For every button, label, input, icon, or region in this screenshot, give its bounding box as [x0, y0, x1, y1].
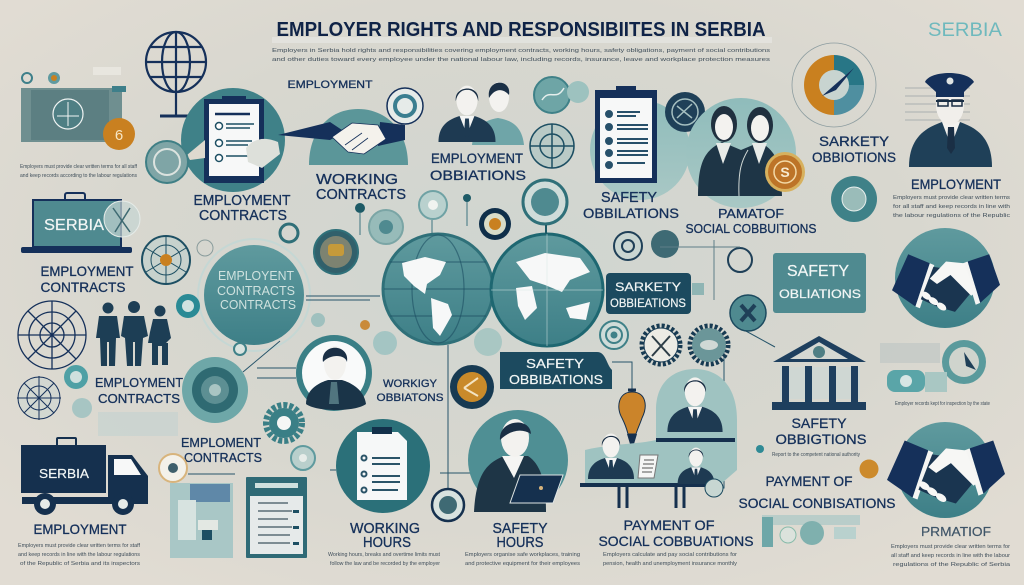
chart: gauge [792, 43, 876, 127]
intro text: Employers in Serbia hold rights and responsibilities covering employment contracts, working hours, safety obligations, payment of social contributions [272, 48, 771, 54]
text block: truck: Employers must provide clear written terms for staff [18, 543, 141, 549]
heading: payment of social cobbuations: SOCIAL COBBUATIONS [598, 533, 754, 549]
arrows: connectors [188, 296, 775, 490]
panel: top-left device [21, 67, 135, 150]
icon: target circle [182, 357, 248, 423]
panel: employment contracts circle: EMPLOYENT [218, 269, 294, 283]
text block: safety hours: and protective equipment for their employees [465, 561, 581, 567]
icon: teal gear [690, 326, 728, 364]
heading: safety obligations [583, 190, 679, 221]
icon: wire globe [146, 32, 206, 116]
heading: safety obligations bank [776, 416, 866, 447]
icon: side circle [942, 340, 986, 384]
heading: sarkety obligations [812, 134, 896, 165]
icon: two women [686, 98, 796, 208]
heading: safety obligations: SAFETY [601, 190, 657, 206]
serbia wordmark: SERBIA [928, 20, 1002, 41]
heading: payment of social contributions [686, 206, 817, 236]
chart: left globe [383, 234, 493, 344]
text block: payment: Employers calculate and pay social contributions for [603, 552, 737, 558]
text block: employment right: Employers must provide clear written terms [893, 195, 1011, 201]
label: safety obligations box: SAFETY [787, 263, 849, 280]
icon: gold keyhole badge [314, 230, 358, 274]
icon: teal connector badge right [523, 180, 567, 234]
heading: payment of social conbisations [738, 474, 896, 511]
label: sarkety obligations box: OBBIEATIONS [610, 296, 686, 310]
heading: sarkety obligations: SARKETY [819, 134, 889, 149]
heading: employment obligations: EMPLOYMENT [431, 151, 523, 166]
heading: employment contracts mid left: CONTRACTS [98, 391, 180, 406]
text block: side: Employer records kept for inspection by the state [895, 401, 990, 407]
label: sarkety obligations box [606, 273, 704, 314]
icon: truck: SERBIA [39, 467, 90, 481]
icon: laptop serbia [21, 193, 140, 253]
heading: employment contracts left: EMPLOYMENT [40, 264, 134, 279]
icon: teal dots left [64, 294, 200, 418]
icon: bank building [772, 336, 866, 410]
heading: payment of social conbisations: PAYMENT OF [766, 474, 852, 489]
icon: orange coin [765, 152, 805, 192]
icon: working hours document [336, 419, 430, 513]
heading: working hours: HOURS [363, 535, 411, 551]
icon: pale building plan [170, 483, 233, 558]
icon: people silhouettes [96, 301, 171, 366]
text block: employment right: for all staff and keep records in line with [893, 204, 1010, 210]
text block: truck: of the Republic of Serbia and its inspectors [20, 561, 141, 567]
heading: working hours: WORKING [350, 521, 420, 537]
icon: two men [438, 82, 524, 145]
icon: gold ring [159, 454, 187, 482]
text block: working hours [328, 552, 441, 567]
heading: employment obligations [430, 151, 526, 183]
icon: handshake top right [892, 228, 1000, 328]
heading: prmatiof: PRMATIOF [921, 525, 991, 539]
text block: safety hours: Employers organise safe workplaces, training [465, 552, 580, 558]
intro text: and other duties toward every employee under the national labour law, including records, insurance, leave and workplace protection measures [272, 57, 771, 63]
icon: compass [142, 236, 190, 284]
icon: laptop serbia: SERBIA [44, 217, 104, 234]
heading: sarkety obligations: OBBIOTIONS [812, 150, 896, 165]
heading: employment contracts mid left [95, 375, 183, 406]
icon: ring connector [432, 489, 464, 521]
icon: truck [21, 438, 148, 515]
text block: top-left: and keep records according to the labour regulations [20, 173, 137, 179]
heading: employment right: EMPLOYMENT [911, 176, 1001, 192]
chart: right globe [491, 234, 603, 346]
text block: truck: and keep records in line with the labour regulations [18, 552, 141, 558]
icon: radar small [530, 124, 574, 168]
heading: payment of social cobbuations: PAYMENT OF [624, 517, 714, 533]
icon: portrait [296, 335, 372, 411]
icon: teal crossed badge [730, 295, 766, 331]
text block: prmatiof: Employers must provide clear written terms for [891, 544, 1010, 550]
heading: working hours [350, 521, 420, 551]
text block: safety hours [465, 552, 581, 567]
text block: payment [603, 552, 738, 567]
text block: prmatiof: all staff and keep records in line with the labour [891, 553, 1010, 559]
text block: working hours: Working hours, breaks and overtime limits must [328, 552, 441, 558]
icon: man with laptop [468, 410, 568, 512]
icon: teal ring center [291, 446, 315, 470]
icon: light bulb [619, 390, 645, 444]
icon: small rings [197, 224, 298, 256]
heading: safety obligations bank: SAFETY [792, 416, 846, 431]
label: safety obligations box: OBLIATIONS [779, 289, 861, 301]
heading: employment contracts: CONTRACTS [199, 208, 287, 224]
text block: bank [756, 445, 860, 458]
heading: safety hours [492, 521, 548, 551]
icon: clipboard with hand [181, 88, 285, 192]
icon: orange ring [450, 365, 494, 409]
heading: employment contracts left [40, 264, 134, 295]
label: safety obligations box [773, 253, 866, 313]
heading: working contracts [316, 171, 406, 203]
icon: small circles beside portrait [234, 313, 502, 356]
text block: payment: pension, health and unemployment insurance monthly [603, 561, 738, 567]
heading: payment of social contributions: PAMATOF [718, 206, 784, 221]
heading: payment of social cobbuations [598, 517, 754, 549]
panel: employment contracts circle: CONTRACTS [220, 298, 296, 312]
icon: officer [905, 73, 992, 167]
icon: top badges [534, 77, 589, 113]
heading: employment truck: EMPLOYMENT [34, 521, 127, 537]
text block: top-left: Employers must provide clear written terms for all staff [20, 164, 138, 170]
title: EMPLOYER RIGHTS AND RESPONSIBIITES IN SERBIA [276, 19, 766, 41]
heading: safety hours: SAFETY [492, 521, 548, 537]
icon: faded strip of icons [762, 515, 860, 547]
heading: safety obligations bank: OBBIGTIONS [776, 432, 866, 447]
heading: employment contracts centre left: EMPLOMENT [181, 435, 261, 450]
icon: white gear with tools [642, 326, 680, 364]
decorative shapes: faded strip [98, 412, 178, 436]
text block: top-left [20, 164, 138, 179]
heading: employment contracts mid left: EMPLOYMENT [95, 375, 183, 390]
icon: safety clipboard [590, 86, 690, 200]
icon: teal stamp [831, 176, 877, 222]
label: safety obligations dark: SAFETY [526, 356, 584, 371]
heading: working contracts: CONTRACTS [316, 186, 406, 203]
icon: left radar [18, 301, 86, 369]
label: safety obligations dark [500, 352, 612, 389]
heading: safety obligations: OBBILATIONS [583, 205, 679, 221]
text block: employment right [893, 195, 1011, 219]
icon: small rings center right [614, 230, 752, 300]
heading: employment contracts centre left [181, 435, 262, 465]
heading: working contracts: WORKING [316, 171, 398, 188]
text block: employment right: the labour regulations of the Republic [893, 213, 1011, 219]
panel: top-left device: 6 [115, 127, 123, 144]
icon: navy badge [665, 92, 705, 132]
intro text [272, 48, 771, 63]
panel: employment contracts circle [198, 239, 310, 351]
icon: orange coin: S [780, 164, 790, 180]
heading: employment contracts centre left: CONTRACTS [184, 450, 262, 465]
heading: working obligations small: OBBIATONS [376, 392, 444, 404]
heading: payment of social contributions: SOCIAL COBBUITIONS [686, 221, 817, 236]
text block: prmatiof [891, 544, 1010, 568]
icon: faded document and pill [880, 343, 947, 392]
icon: handshake bottom right [887, 422, 1005, 518]
heading: employment contracts left: CONTRACTS [40, 280, 126, 295]
icon: ring target [600, 321, 628, 349]
icon: orange seal [860, 460, 878, 478]
icon: meeting scene [580, 369, 737, 508]
text block: truck [18, 543, 141, 567]
heading: employment contracts: EMPLOYMENT [194, 193, 291, 209]
text block: working hours: follow the law and be recorded by the employer [330, 561, 440, 567]
icon: small radar [17, 376, 61, 420]
icon: gear [266, 405, 302, 441]
text block: prmatiof: regulations of the Republic of Serbia [893, 562, 1010, 568]
label: safety obligations dark: OBBIBATIONS [509, 372, 603, 387]
icon: checklist document [246, 477, 307, 558]
icon: handshake contract [278, 109, 408, 165]
icon: ring badge [387, 88, 423, 124]
text block: bank: Report to the competent national authority [772, 452, 860, 458]
heading: working obligations small [376, 378, 444, 404]
heading: working obligations small: WORKIGY [383, 378, 438, 390]
heading: employment obligations: OBBIATIONS [430, 167, 526, 183]
heading: employment contracts [194, 193, 291, 224]
icon: striped badge [146, 141, 188, 183]
label: sarkety obligations box: SARKETY [615, 280, 681, 294]
icon: teal connector badges [355, 191, 511, 244]
heading: employment: EMPLOYMENT [288, 79, 373, 91]
heading: safety hours: HOURS [496, 535, 544, 551]
heading: payment of social conbisations: SOCIAL CONBISATIONS [738, 496, 896, 511]
panel: employment contracts circle: CONTRACTS [217, 284, 295, 298]
